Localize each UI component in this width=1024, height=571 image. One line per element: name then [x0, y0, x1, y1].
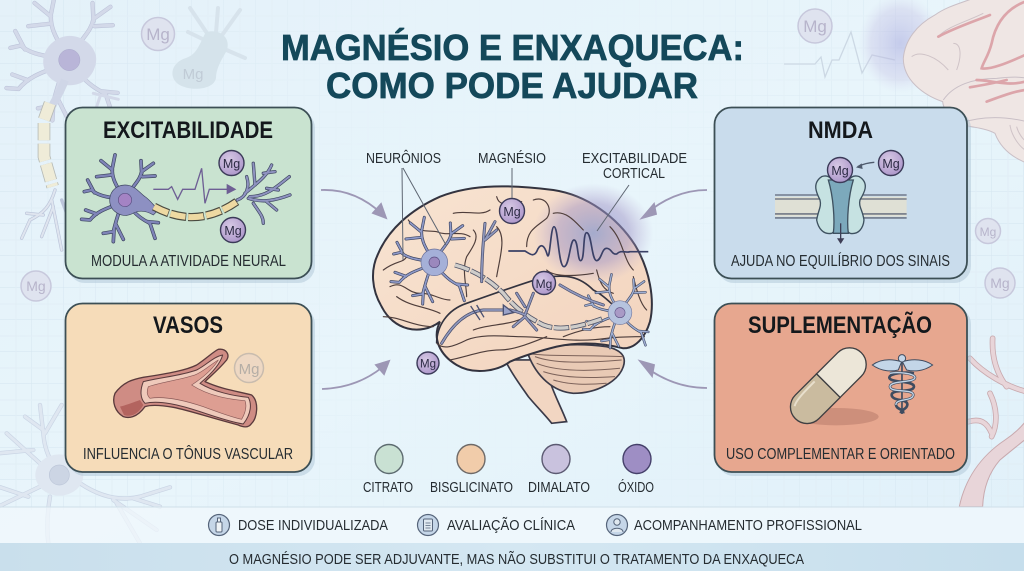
- óxido: ÓXIDO: [618, 479, 654, 496]
- neuron in occipital lobe: [583, 274, 648, 348]
- bisglicinato: BISGLICINATO: [430, 480, 513, 496]
- caption: USO COMPLEMENTAR E ORIENTADO: [726, 446, 955, 463]
- axons: [455, 265, 603, 328]
- óxido: [618, 444, 654, 496]
- ECG arrow: [153, 168, 235, 203]
- Mg ion: Mg: [224, 224, 242, 238]
- neuron in frontal lobe: [391, 217, 468, 304]
- central brain illustration: [373, 183, 653, 423]
- faded Mg ion: Mg: [239, 361, 259, 378]
- label: neurônios: [366, 150, 446, 260]
- background faded neuron with Mg: Mg: [183, 66, 203, 83]
- heading: suplementação: SUPLEMENTAÇÃO: [748, 311, 932, 339]
- Mg ion middle: [532, 272, 556, 294]
- citrato: CITRATO: [363, 480, 413, 496]
- blood vessel illustration: [114, 349, 257, 427]
- Mg ion top: [500, 198, 524, 224]
- background faded brain top right: [858, 0, 1024, 163]
- heading: vasos: VASOS: [153, 312, 223, 339]
- background Mg ions: Mg: [803, 17, 827, 36]
- background neuron top left: [6, 0, 118, 250]
- Mg ion: [219, 150, 244, 176]
- Mg ion middle: Mg: [536, 277, 552, 291]
- background Mg ions: Mg: [26, 278, 46, 294]
- Mg ion: Mg: [882, 157, 900, 171]
- arrow: suplementação to brain: [640, 361, 707, 388]
- dimalato: [528, 444, 590, 496]
- arrow: NMDA to brain: [642, 190, 707, 218]
- title: [281, 27, 744, 106]
- panel: suplementação: [714, 304, 971, 476]
- background ECG line: [784, 32, 895, 77]
- background Mg ions: Mg: [980, 225, 996, 239]
- heading: NMDA: NMDA: [808, 117, 873, 144]
- neuron illustration: [82, 155, 290, 242]
- caption: MODULA A ATIVIDADE NEURAL: [91, 253, 286, 270]
- Mg ion: [828, 158, 852, 182]
- label: magnésio: [478, 150, 546, 198]
- background Mg ions: [21, 9, 1015, 301]
- background Mg ions: Mg: [146, 25, 170, 44]
- text: avaliação: AVALIAÇÃO CLÍNICA: [447, 517, 575, 534]
- panel: vasos: [66, 304, 315, 476]
- text: dose: DOSE INDIVIDUALIZADA: [238, 518, 388, 534]
- Mg ion outside: Mg: [420, 358, 436, 370]
- background Mg ions: Mg: [990, 275, 1010, 291]
- arrow: excitabilidade to brain: [321, 190, 386, 218]
- label: excitabilidade cortical: [582, 151, 687, 231]
- Mg ion: Mg: [831, 164, 849, 178]
- citrato: [363, 444, 413, 496]
- title: MAGNÉSIO E ENXAQUECA:: [281, 27, 744, 68]
- magnesium forms legend: [363, 444, 654, 496]
- disclaimer bar: [0, 543, 1024, 571]
- cortical excitability wave: [508, 227, 648, 267]
- label: excitabilidade cortical: CORTICAL: [603, 166, 665, 182]
- Mg ion: [878, 150, 904, 176]
- background faded neuron with Mg: [172, 8, 245, 89]
- Mg ion: [220, 218, 246, 242]
- background neuron bottom left: [0, 405, 170, 543]
- label: magnésio: MAGNÉSIO: [478, 150, 546, 167]
- caption: AJUDA NO EQUILÍBRIO DOS SINAIS: [731, 253, 950, 270]
- dimalato: DIMALATO: [528, 480, 590, 496]
- icon: professional: [606, 514, 628, 536]
- arrow: vasos to brain: [322, 361, 389, 389]
- Mg ion: Mg: [223, 157, 240, 171]
- Mg ion top: Mg: [503, 205, 521, 219]
- text: acompanhamento: ACOMPANHAMENTO PROFISSIONAL: [634, 518, 862, 534]
- capsule illustration: [784, 341, 879, 430]
- panel: excitabilidade: [66, 108, 315, 283]
- NMDA receptor illustration: [775, 162, 907, 244]
- label: excitabilidade cortical: EXCITABILIDADE: [582, 151, 687, 167]
- caption: INFLUENCIA O TÔNUS VASCULAR: [83, 446, 293, 463]
- caduceus icon: [872, 355, 933, 414]
- background vessels bottom right: [959, 338, 1024, 507]
- bisglicinato: [430, 444, 513, 496]
- recommendations strip: [0, 507, 1024, 543]
- heading: excitabilidade: EXCITABILIDADE: [103, 117, 273, 144]
- title: COMO PODE AJUDAR: [326, 65, 698, 106]
- Mg ion outside: [417, 352, 439, 374]
- disclaimer bar: O MAGNÉSIO PODE SER ADJUVANTE, MAS NÃO SUBSTITUI O TRATAMENTO DA ENXAQUECA: [229, 551, 804, 568]
- icon: dose bottle: [208, 514, 230, 536]
- icon: clipboard: [418, 514, 438, 536]
- label: neurônios: NEURÔNIOS: [366, 150, 441, 167]
- faded Mg ion: [234, 354, 264, 382]
- panel: NMDA: [714, 108, 971, 283]
